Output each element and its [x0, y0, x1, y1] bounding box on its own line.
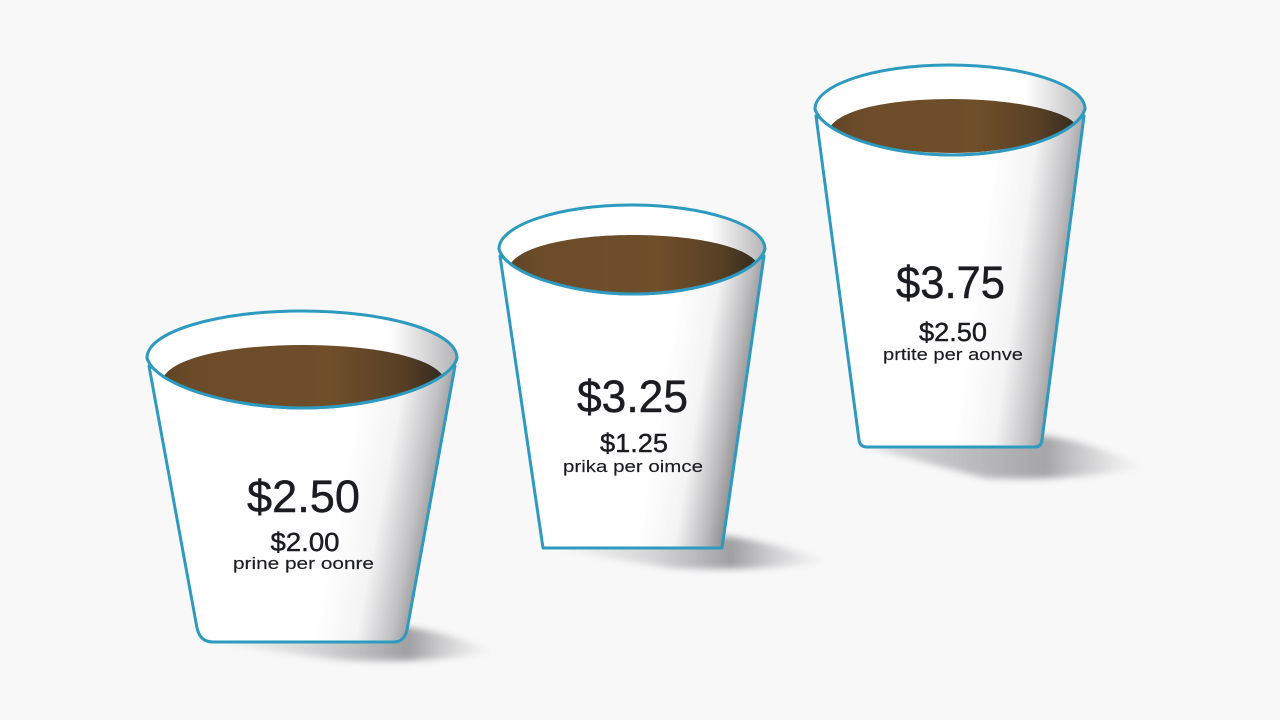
cup 2 coffee: [511, 235, 757, 293]
cup 2 secondary price: $1.25: [600, 428, 668, 458]
cup 2 body: [500, 256, 764, 548]
cup 3 caption: prtite per aonve: [883, 345, 1023, 364]
cup 3 shadow: [865, 436, 1145, 479]
cup 3 coffee: [830, 99, 1075, 153]
cup 3 secondary price: $2.50: [919, 317, 987, 347]
cup 1 rim front edge: [147, 358, 457, 408]
cup 2 rim front edge: [499, 249, 765, 294]
cup 1 price: $2.50: [247, 471, 360, 522]
cup 3 body: [816, 116, 1084, 447]
cup 1 caption: prine per oonre: [233, 554, 374, 573]
cup 3 rim front edge: [815, 109, 1085, 155]
cup 1 rim: [147, 311, 457, 408]
cup 1: $2.50: [147, 311, 495, 661]
cup 3 rim: [815, 65, 1085, 155]
cup 3: $3.75: [815, 65, 1145, 479]
cup 2 price: $3.25: [577, 371, 688, 422]
cup 1 coffee: [164, 345, 443, 407]
cup 1 body: [149, 366, 455, 642]
cup 1 secondary price: $2.00: [270, 527, 340, 557]
cup 3 price: $3.75: [896, 257, 1005, 308]
cup 2: $3.25: [499, 205, 830, 569]
cup 2 rim: [499, 205, 765, 294]
cup 1 shadow: [205, 627, 495, 661]
cup 2 caption: prika per oimce: [563, 457, 703, 476]
cup 2 shadow: [548, 536, 830, 569]
